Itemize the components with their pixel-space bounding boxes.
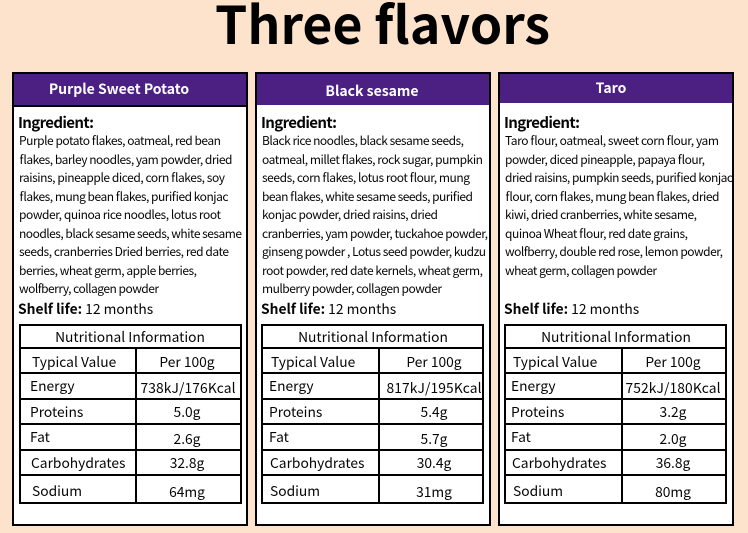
nutrition table: Nutritional Information <box>55 326 205 346</box>
nutrition table: 31mg <box>416 481 452 501</box>
ingredient list <box>19 132 242 297</box>
panel: Purple Sweet Potato <box>13 73 247 525</box>
nutrition table: 36.8g <box>656 452 691 472</box>
nutrition table: Typical Value <box>513 351 598 371</box>
ingredient list <box>505 132 733 279</box>
ingredient list: seeds, corn flakes, lotus root flour, mung <box>262 169 470 186</box>
ingredient heading: Ingredient: <box>504 112 580 133</box>
nutrition table: Energy <box>511 375 556 395</box>
panel header: Taro: Taro <box>596 78 627 98</box>
ingredient list: berries, wheat germ, apple berries, <box>19 262 197 279</box>
nutrition table: Per 100g <box>645 351 701 371</box>
panel header: Black sesame: Black sesame <box>325 81 419 101</box>
nutrition table: 30.4g <box>417 452 452 472</box>
ingredient list: flour, corn flakes, mung bean flakes, dried <box>505 188 719 205</box>
ingredient list: flakes, barley noodles, yam powder, dried <box>19 151 232 168</box>
ingredient list: Taro flour, oatmeal, sweet corn flour, yam <box>505 132 719 149</box>
panel: Black sesame <box>256 73 490 525</box>
nutrition table: Sodium <box>32 480 82 500</box>
nutrition table: Carbohydrates <box>512 452 607 472</box>
ingredient list: wolfberry, collagen powder <box>19 280 159 297</box>
nutrition table: 2.6g <box>174 428 201 448</box>
nutrition table: Energy <box>269 375 314 395</box>
nutrition table: Per 100g <box>406 351 462 371</box>
ingredient list: seeds, cranberries Dried berries, red date <box>19 243 229 260</box>
nutrition table: 752kJ/180Kcal <box>626 377 721 397</box>
panel header: Black sesame <box>257 74 489 105</box>
nutrition table: Proteins <box>30 401 83 421</box>
ingredient list: Black rice noodles, black sesame seeds, <box>262 132 464 149</box>
nutrition table: Per 100g <box>159 351 215 371</box>
nutrition table: Typical Value <box>271 351 356 371</box>
nutrition table <box>505 325 726 503</box>
nutrition table: 80mg <box>655 481 691 501</box>
nutrition table: 32.8g <box>170 452 205 472</box>
ingredient list: oatmeal, millet flakes, rock sugar, pumpkin <box>262 151 483 168</box>
ingredient list: Purple potato flakes, oatmeal, red bean <box>19 132 221 149</box>
ingredient list: mulberry powder, collagen powder <box>262 280 442 297</box>
shelf life: Shelf life: 12 months <box>261 298 396 318</box>
ingredient list: kiwi, dried cranberries, white sesame, <box>505 206 697 223</box>
nutrition table: Fat <box>511 426 531 446</box>
ingredient list: root powder, red date kernels, wheat germ, <box>262 262 483 279</box>
nutrition table: 738kJ/176Kcal <box>140 377 236 397</box>
nutrition table: 817kJ/195Kcal <box>386 377 482 397</box>
ingredient list: quinoa Wheat flour, red date grains, <box>505 225 688 242</box>
ingredient list: flakes, mung bean flakes, purified konjac <box>19 188 228 205</box>
panel: Taro <box>499 73 733 525</box>
ingredient list: raisins, pineapple diced, corn flakes, soy <box>19 169 226 186</box>
shelf life: Shelf life: 12 months <box>504 298 639 318</box>
ingredient list <box>262 132 488 297</box>
nutrition table: Nutritional Information <box>541 326 691 346</box>
nutrition table: Nutritional Information <box>298 326 448 346</box>
ingredient list: dried raisins, pumpkin seeds, purified konjac <box>505 169 733 186</box>
ingredient list: bean flakes, white sesame seeds, purified <box>262 188 473 205</box>
panel header: Purple Sweet Potato: Purple Sweet Potato <box>49 79 189 99</box>
nutrition table: Energy <box>30 375 75 395</box>
nutrition table: 64mg <box>169 481 205 501</box>
nutrition table <box>262 325 483 503</box>
nutrition table <box>20 325 241 503</box>
nutrition table: 5.0g <box>174 401 201 421</box>
nutrition table: 2.0g <box>660 428 687 448</box>
shelf life: Shelf life: 12 months <box>18 298 153 318</box>
nutrition table: Sodium <box>513 480 563 500</box>
ingredient list: wolfberry, double red rose, lemon powder, <box>505 243 723 260</box>
ingredient list: wheat germ, collagen powder <box>505 262 657 279</box>
nutrition table: Fat <box>269 426 289 446</box>
ingredient list: ginseng powder , Lotus seed powder, kudzu <box>262 243 486 260</box>
nutrition table: Sodium <box>270 480 320 500</box>
nutrition table: Proteins <box>269 401 322 421</box>
nutrition table: 5.7g <box>421 428 448 448</box>
ingredient list: noodles, black sesame seeds, white sesame <box>19 225 242 242</box>
nutrition table: Typical Value <box>32 351 117 371</box>
nutrition table: Proteins <box>511 401 564 421</box>
nutrition table: Carbohydrates <box>270 452 365 472</box>
panel header: Taro <box>500 74 732 103</box>
ingredient heading: Ingredient: <box>261 112 337 133</box>
ingredient list: konjac powder, dried raisins, dried <box>262 206 438 223</box>
nutrition table: 5.4g <box>421 401 448 421</box>
nutrition table: Carbohydrates <box>31 452 126 472</box>
ingredient list: cranberries, yam powder, tuckahoe powder, <box>262 225 488 242</box>
ingredient list: powder, quinoa rice noodles, lotus root <box>19 206 221 223</box>
ingredient heading: Ingredient: <box>18 112 94 133</box>
panel header: Purple Sweet Potato <box>14 74 246 107</box>
ingredient list: powder, diced pineapple, papaya flour, <box>505 151 705 168</box>
nutrition table: 3.2g <box>660 401 687 421</box>
nutrition table: Fat <box>30 426 50 446</box>
